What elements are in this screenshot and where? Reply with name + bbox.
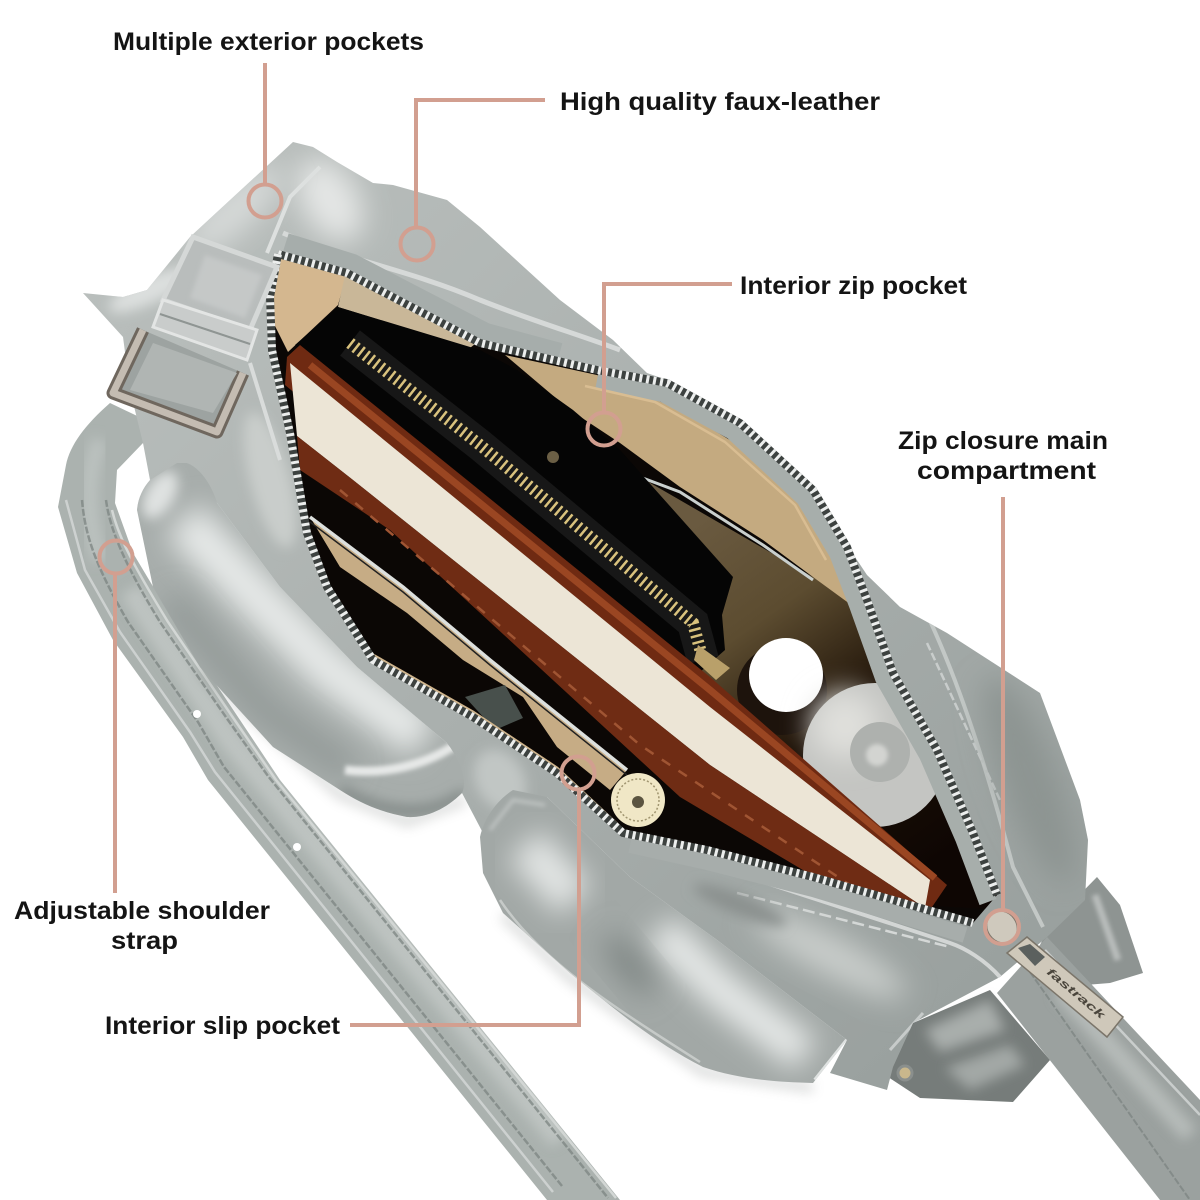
label: Zip closure main compartment: compartment	[917, 457, 1097, 485]
pale lining edge	[640, 477, 813, 580]
bag body	[83, 142, 1094, 1090]
label: Interior slip pocket	[105, 756, 594, 1040]
label: Interior slip pocket: Interior slip pocket	[105, 1012, 341, 1040]
left exterior pocket	[137, 463, 463, 818]
buckle and strap loop	[113, 237, 277, 432]
lower slip pocket	[310, 517, 665, 827]
beige lining, pale band	[338, 275, 480, 348]
label: Zip closure main compartment	[898, 427, 1108, 944]
black wallet	[295, 307, 733, 680]
right exterior pocket	[480, 790, 847, 1083]
soft shadows beneath the bag	[200, 670, 813, 1088]
right strap tail and side flap	[885, 877, 1143, 1102]
label: High quality faux-leather	[400, 88, 880, 260]
book	[285, 345, 947, 910]
round ball	[803, 683, 947, 827]
label: Multiple exterior pockets: Multiple exterior pockets	[113, 28, 424, 56]
label: Interior zip pocket	[588, 272, 968, 446]
label: Adjustable shoulder strap	[14, 540, 270, 955]
zip slider and pull tab: fastrack	[1044, 966, 1108, 1023]
shoulder strap	[50, 395, 630, 1200]
label: High quality faux-leather: High quality faux-leather	[560, 88, 880, 116]
bottle	[737, 638, 827, 735]
bag interior	[270, 254, 1010, 923]
label: Adjustable shoulder strap: Adjustable shoulder	[14, 897, 270, 925]
zipper	[270, 242, 997, 935]
label: Adjustable shoulder strap: strap	[111, 927, 178, 955]
beige lining, upper left	[274, 259, 345, 352]
coin	[611, 773, 665, 827]
zip slider and pull tab	[980, 904, 1200, 1200]
label: Zip closure main compartment: Zip closure main	[898, 427, 1108, 455]
beige lining, zip pocket	[505, 355, 865, 615]
label: Multiple exterior pockets	[113, 28, 424, 218]
label: Interior zip pocket: Interior zip pocket	[740, 272, 968, 300]
lining, dark lower right	[640, 477, 1010, 910]
